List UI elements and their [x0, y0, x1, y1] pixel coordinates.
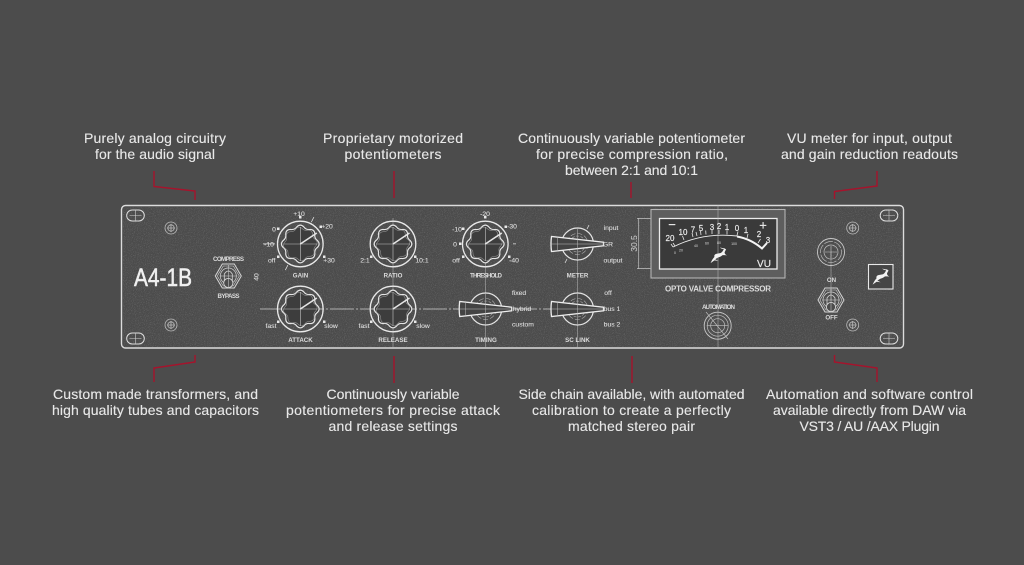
meter numerals: 5 — [699, 224, 704, 233]
callout: compression ratio potentiometer: between 2:1 and 10:1 — [565, 162, 698, 178]
callout: transformers — [52, 355, 259, 418]
callout: VU meter — [781, 130, 958, 199]
knob: threshold: -10 — [452, 226, 462, 234]
meter numerals: 3 — [766, 236, 771, 245]
selector: timing: custom — [512, 322, 534, 328]
callout: VU meter: and gain reduction readouts — [781, 146, 958, 162]
callout: purely analog circuitry: for the audio signal — [95, 146, 215, 162]
brand logo box — [868, 264, 893, 289]
selector: meter: output — [604, 258, 623, 264]
meter numerals: VU — [757, 259, 771, 270]
knob: attack: slow — [324, 323, 338, 330]
callout: compression ratio potentiometer: Continuously variable potentiometer — [518, 130, 745, 146]
callout: side chain: matched stereo pair — [568, 418, 695, 434]
meter percent dots: 20 — [679, 248, 683, 252]
panel guide lines — [260, 205, 831, 348]
selector: meter: input — [604, 225, 618, 232]
callout: attack and release: and release settings — [328, 418, 458, 434]
dimension: 30.5 — [629, 218, 659, 269]
compress bypass toggle: COMPRESS — [213, 256, 244, 263]
callout: attack and release — [286, 356, 501, 434]
selector: meter: GR — [603, 242, 613, 248]
selector: timing: hybrid — [513, 306, 531, 313]
meter numerals: + — [759, 218, 767, 232]
model caption: OPTO VALVE COMPRESSOR — [665, 284, 771, 294]
callout: purely analog circuitry: Purely analog circuitry — [84, 130, 226, 146]
knob: threshold: off — [452, 258, 460, 264]
callout: VU meter: VU meter for input, output — [787, 130, 952, 146]
selector: timing — [459, 290, 534, 344]
meter numerals: 3 — [710, 223, 715, 232]
callout: motorized potentiometers — [323, 130, 463, 198]
power toggle: OFF — [825, 314, 838, 322]
meter percent dots: 80 — [717, 241, 721, 245]
knob: gain: +20 — [321, 224, 333, 230]
VU meter — [651, 210, 785, 278]
knob: threshold: -40 — [509, 258, 519, 264]
callout: side chain: Side chain available, with automated — [518, 386, 744, 402]
knob: ratio: 10:1 — [415, 258, 429, 264]
knob: ratio — [360, 221, 429, 280]
knob: threshold: 0 — [453, 242, 457, 248]
meter red zone — [737, 236, 767, 248]
selector: meter — [551, 225, 623, 280]
compress bypass toggle: BYPASS — [218, 293, 240, 300]
callout: attack and release: potentiometers for precise attack — [286, 402, 501, 418]
knob: release: slow — [416, 323, 430, 330]
callout: side chain — [518, 356, 744, 434]
model name: A4-1B — [134, 264, 192, 292]
callout: compression ratio potentiometer: for precise compression ratio, — [536, 146, 728, 162]
callout: attack and release: Continuously variable — [326, 386, 460, 402]
rack panel — [122, 205, 904, 348]
knob: gain: -10 — [264, 242, 274, 248]
knob: attack: fast — [266, 323, 277, 330]
selector: timing: TIMING — [475, 337, 497, 344]
knob: gain: +30 — [323, 258, 335, 264]
callout: purely analog circuitry — [84, 130, 226, 200]
meter numerals: 2 — [757, 230, 762, 239]
knob: gain: GAIN — [293, 272, 309, 280]
knob: attack — [266, 286, 338, 344]
callout: side chain: calibration to create a perfectly — [532, 402, 731, 418]
power toggle — [818, 277, 844, 322]
meter percent dots: 100 — [731, 242, 737, 246]
meter numerals: 7 — [691, 226, 696, 234]
callout: transformers: high quality tubes and capacitors — [52, 402, 259, 418]
power indicator — [818, 238, 844, 266]
knob: ratio: 2:1 — [360, 258, 370, 264]
selector: meter: METER — [567, 272, 589, 280]
meter percent dots — [674, 241, 737, 255]
meter percent dots: 0 — [674, 251, 676, 255]
selector: side chain link: bus 1 — [604, 306, 621, 313]
compress bypass toggle — [213, 256, 244, 300]
rotated 40 mark: 40 — [254, 273, 260, 281]
knob: release: RELEASE — [378, 337, 408, 344]
meter ticks — [671, 230, 760, 247]
meter numerals: 1 — [744, 226, 749, 235]
selector: side chain link: bus 2 — [604, 322, 621, 328]
callout: motorized potentiometers: potentiometers — [344, 146, 442, 162]
callout: transformers: Custom made transformers, and — [53, 386, 258, 402]
meter deer logo — [711, 248, 727, 263]
knob: ratio: RATIO — [384, 272, 403, 280]
knob: threshold: -30 — [507, 224, 517, 230]
callout: automation: Automation and software control — [766, 386, 973, 402]
screws — [165, 222, 859, 331]
selector: side chain link: off — [604, 290, 612, 297]
knob: threshold: THRESHOLD — [470, 272, 503, 280]
meter numerals: 0 — [735, 224, 740, 233]
knob: gain: 0 — [272, 226, 276, 234]
meter percent dots: 60 — [705, 242, 709, 246]
callout: automation — [766, 355, 973, 434]
mounting slots — [127, 210, 898, 344]
callout: motorized potentiometers: Proprietary motorized — [323, 130, 463, 146]
knob: attack: ATTACK — [288, 337, 313, 344]
selector: side chain link — [551, 290, 621, 344]
meter numerals: − — [668, 217, 676, 232]
knob: release: fast — [359, 323, 370, 330]
automation knob — [702, 304, 736, 339]
meter numerals: 20 — [666, 234, 675, 243]
meter numerals: 2 — [717, 222, 722, 231]
callout: compression ratio potentiometer — [518, 130, 745, 198]
knob: threshold — [452, 211, 519, 280]
meter numerals: 1 — [725, 223, 730, 232]
meter numerals — [666, 217, 771, 270]
selector: side chain link: SC LINK — [565, 337, 590, 344]
meter percent dots: 40 — [694, 244, 698, 248]
knob: gain: off — [268, 258, 276, 264]
knob: gain — [263, 211, 335, 280]
power toggle: ON — [827, 277, 837, 284]
meter numerals: 10 — [679, 228, 688, 237]
meter scale arc — [673, 235, 737, 247]
selector: timing: fixed — [512, 290, 526, 297]
automation knob: AUTOMATION — [702, 304, 736, 311]
callout: automation: VST3 / AU /AAX Plugin — [800, 418, 940, 434]
knob: release — [359, 286, 430, 344]
knob: gain: +10 — [293, 211, 305, 218]
dimension: 30.5: 30.5 — [629, 235, 639, 252]
knob: threshold: -20 — [480, 211, 490, 218]
callout: automation: available directly from DAW via — [773, 402, 966, 418]
